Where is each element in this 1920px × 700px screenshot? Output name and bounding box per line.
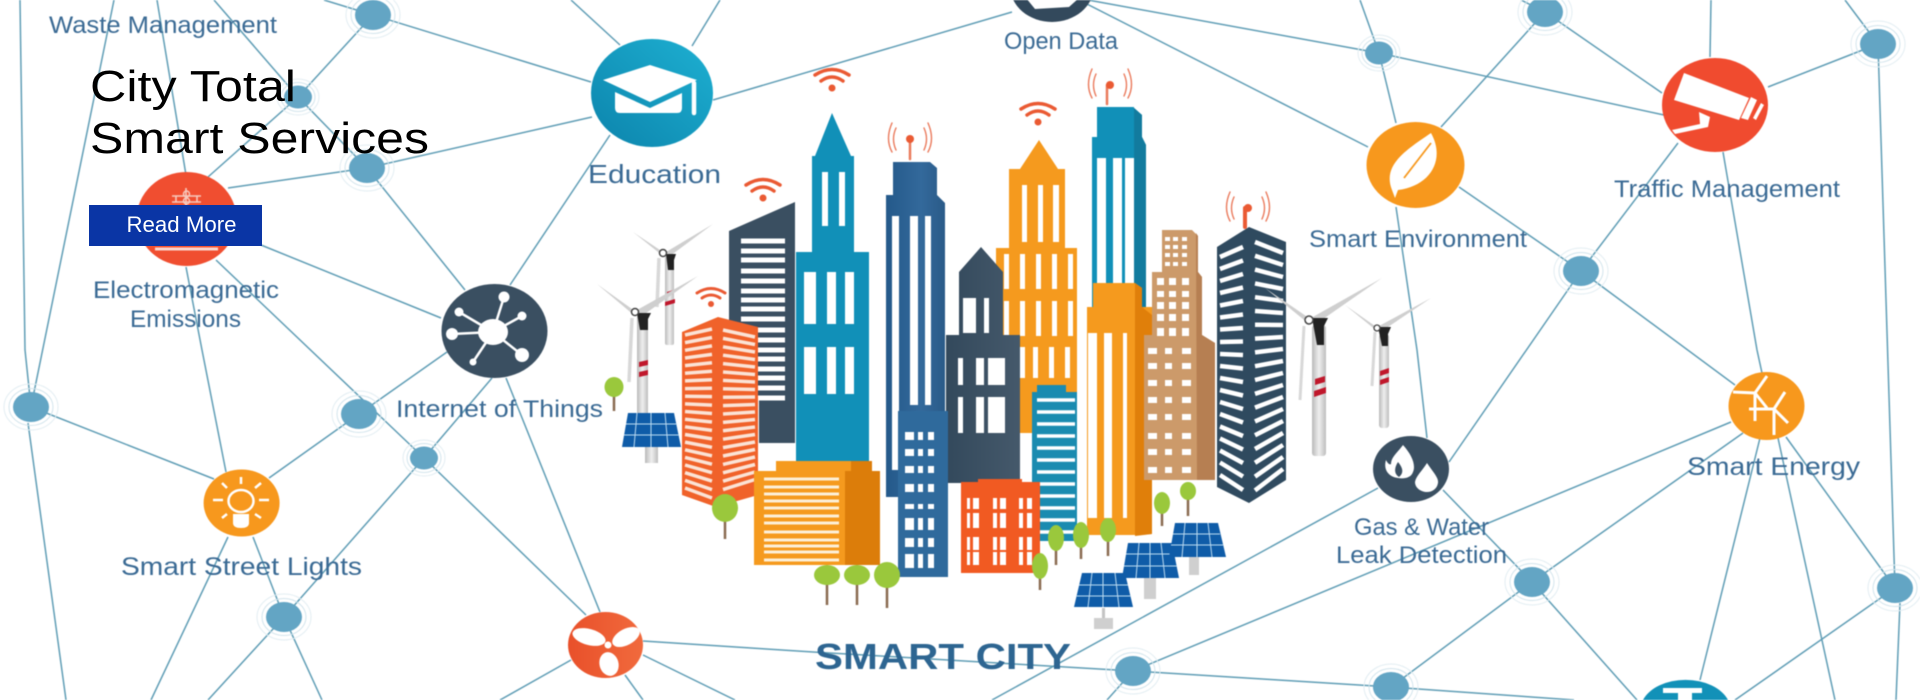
navy tower	[886, 162, 945, 497]
node: far left	[4, 384, 58, 430]
wind turbine 2	[597, 276, 698, 463]
red-orange small building	[961, 479, 1040, 573]
label: waste management: Waste Management	[49, 12, 277, 39]
orange front tower	[1087, 283, 1152, 536]
label: smart city: SMART CITY	[815, 636, 1071, 677]
wifi icon 1	[815, 70, 849, 92]
icon: bottom teal water	[1643, 680, 1728, 700]
antenna 2	[1088, 69, 1132, 104]
icon: fan	[568, 612, 643, 678]
solar panel 3	[1122, 543, 1179, 599]
label: smart energy: Smart Energy	[1687, 453, 1861, 481]
icon: smart environment leaf	[1366, 122, 1464, 208]
orange stepped tower	[996, 140, 1077, 433]
node: bottom centre	[1106, 648, 1160, 694]
city skyline	[597, 69, 1431, 629]
solar panel 1	[622, 413, 681, 447]
antenna icons	[888, 69, 1270, 227]
node: below waste management	[277, 79, 319, 115]
label: gas and water leak detection: Leak Detection	[1336, 542, 1507, 569]
title	[90, 62, 429, 163]
wifi icon 2	[746, 180, 780, 202]
label: gas and water leak detection	[1336, 514, 1507, 569]
icon: open data	[1010, 0, 1094, 22]
wifi icon 4	[1021, 104, 1055, 126]
icon: gas and water leak	[1373, 436, 1449, 502]
node: below street lights	[257, 594, 311, 640]
icon: smart energy wind turbines	[1728, 372, 1804, 440]
icon: internet of things	[442, 284, 548, 378]
node: small centre left	[403, 440, 445, 476]
wifi icon 3	[697, 288, 725, 307]
tan building	[1144, 230, 1215, 480]
trees	[604, 377, 1196, 608]
label: electromagnetic emissions	[93, 277, 279, 333]
label: smart street lights: Smart Street Lights	[121, 553, 362, 581]
antenna 1	[888, 123, 932, 159]
node: right of environment	[1554, 248, 1608, 294]
dark slanted building	[729, 202, 795, 443]
label: internet of things: Internet of Things	[396, 396, 603, 423]
node: far right	[1868, 565, 1920, 611]
wifi signal icons	[697, 70, 1055, 307]
icon: education graduation cap	[591, 39, 713, 147]
blue low tower	[898, 411, 948, 577]
read more button: Read More	[126, 212, 236, 237]
dark peaked building	[946, 247, 1020, 483]
icon: traffic management camera	[1662, 58, 1768, 152]
wind turbine 1	[633, 224, 713, 345]
wind turbine 4	[1345, 298, 1431, 428]
label: electromagnetic emissions: Emissions	[130, 306, 241, 333]
wind turbine 3	[1265, 278, 1382, 456]
dark striped high-rise	[1217, 227, 1286, 503]
icon: electromagnetic emissions	[136, 172, 236, 266]
node: top right 2	[1358, 35, 1400, 71]
title: Smart Services	[90, 114, 429, 163]
solar panel 4	[1169, 523, 1226, 575]
node: top right 1	[1518, 0, 1572, 35]
antenna 3	[1226, 192, 1270, 227]
node: top right 3	[1851, 21, 1905, 67]
red-orange striped building	[682, 317, 758, 507]
read more button	[89, 205, 262, 246]
node: near internet of things	[332, 391, 386, 437]
label: electromagnetic emissions: Electromagnetic	[93, 277, 279, 304]
label: smart environment: Smart Environment	[1309, 226, 1527, 253]
teal front building	[1032, 385, 1077, 541]
solar panel 2	[1074, 573, 1133, 629]
node: right of title	[340, 145, 394, 191]
low orange building	[754, 461, 880, 565]
icon: smart street lights bulb	[204, 470, 280, 536]
tall teal tower	[1092, 107, 1146, 310]
label: open data: Open Data	[1004, 28, 1119, 55]
node: top left	[346, 0, 400, 38]
teal spire tower	[796, 113, 869, 462]
label: gas and water leak detection: Gas & Water	[1354, 514, 1489, 541]
node: below gas and water	[1505, 559, 1559, 605]
node: bottom right	[1364, 664, 1418, 700]
label: education: Education	[588, 159, 721, 189]
label: traffic management: Traffic Management	[1614, 176, 1840, 203]
title: City Total	[90, 62, 296, 111]
